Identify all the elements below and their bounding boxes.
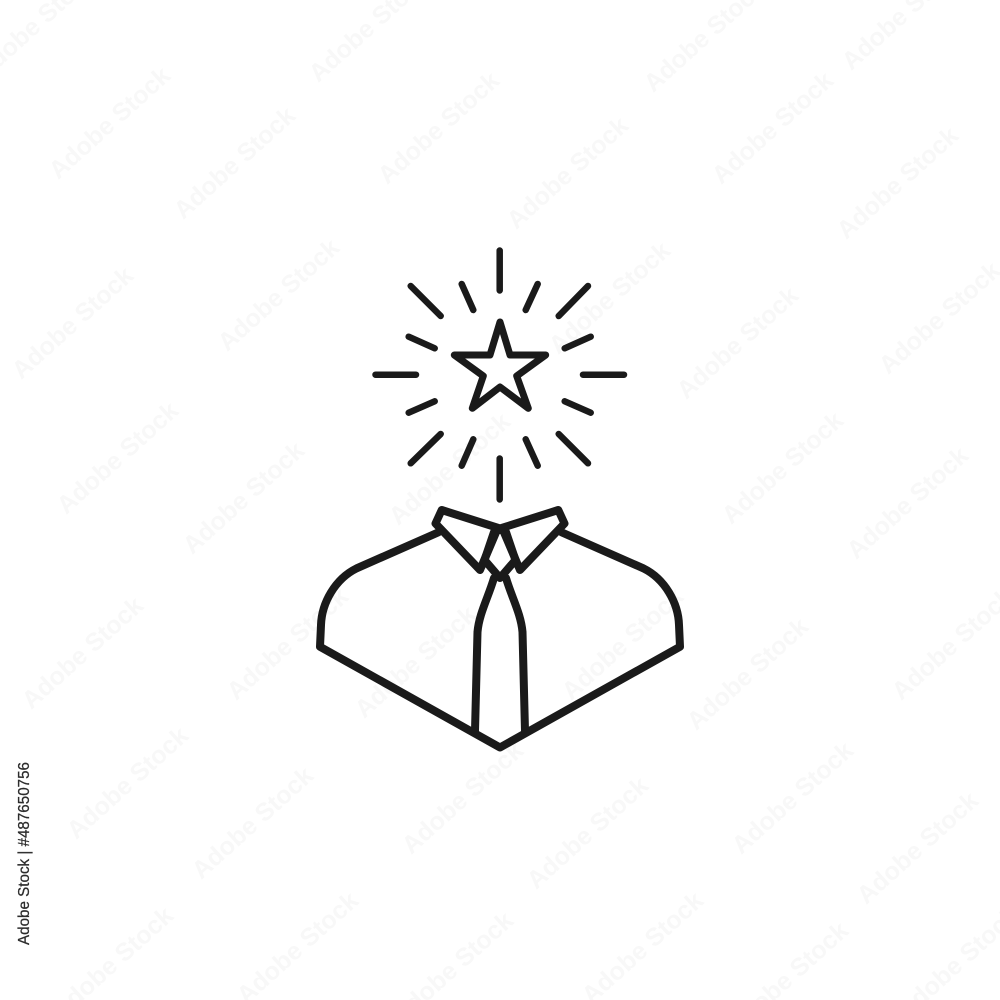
watermark pattern: Adobe Stock (187, 761, 319, 885)
tie knot (484, 532, 516, 578)
watermark pattern: Adobe Stock (62, 721, 194, 845)
watermark pattern: Adobe Stock (17, 591, 149, 715)
watermark pattern: Adobe Stock (52, 396, 184, 520)
watermark pattern: Adobe Stock (522, 771, 654, 895)
watermark pattern: Adobe Stock (373, 66, 505, 190)
watermark pattern: Adobe Stock (44, 61, 176, 185)
watermark pattern: Adobe Stock (707, 66, 839, 190)
watermark pattern: Adobe Stock (169, 101, 301, 225)
shirt body (320, 532, 680, 748)
watermark pattern: Adobe Stock (397, 736, 529, 860)
stock image identifier: Adobe Stock | #487650756 (16, 762, 33, 945)
tie (475, 578, 525, 731)
watermark pattern: Adobe Stock (213, 233, 345, 357)
watermark pattern: Adobe Stock (384, 407, 516, 531)
watermark pattern: Adobe Stock (832, 121, 964, 245)
watermark pattern: Adobe Stock (544, 236, 676, 360)
watermark pattern: Adobe Stock (178, 436, 310, 560)
watermark pattern: Adobe Stock (222, 582, 354, 706)
shirt collar (436, 510, 564, 570)
watermark pattern: Adobe Stock (350, 600, 482, 724)
watermark pattern: Adobe Stock (727, 736, 859, 860)
icon: businessperson torso with shirt and tie (320, 510, 680, 748)
watermark pattern: Adobe Stock (7, 261, 139, 385)
watermark pattern: Adobe Stock (717, 406, 849, 530)
watermark pattern: Adobe Stock (852, 786, 984, 910)
watermark pattern: Adobe Stock (672, 281, 804, 405)
icon: star (454, 322, 546, 408)
watermark pattern: Adobe Stock (842, 441, 974, 565)
watermark pattern: Adobe Stock (682, 612, 814, 736)
watermark pattern: Adobe Stock (502, 111, 634, 235)
watermark pattern: Adobe Stock (557, 582, 689, 706)
icon: radiating lines around star (376, 250, 624, 500)
